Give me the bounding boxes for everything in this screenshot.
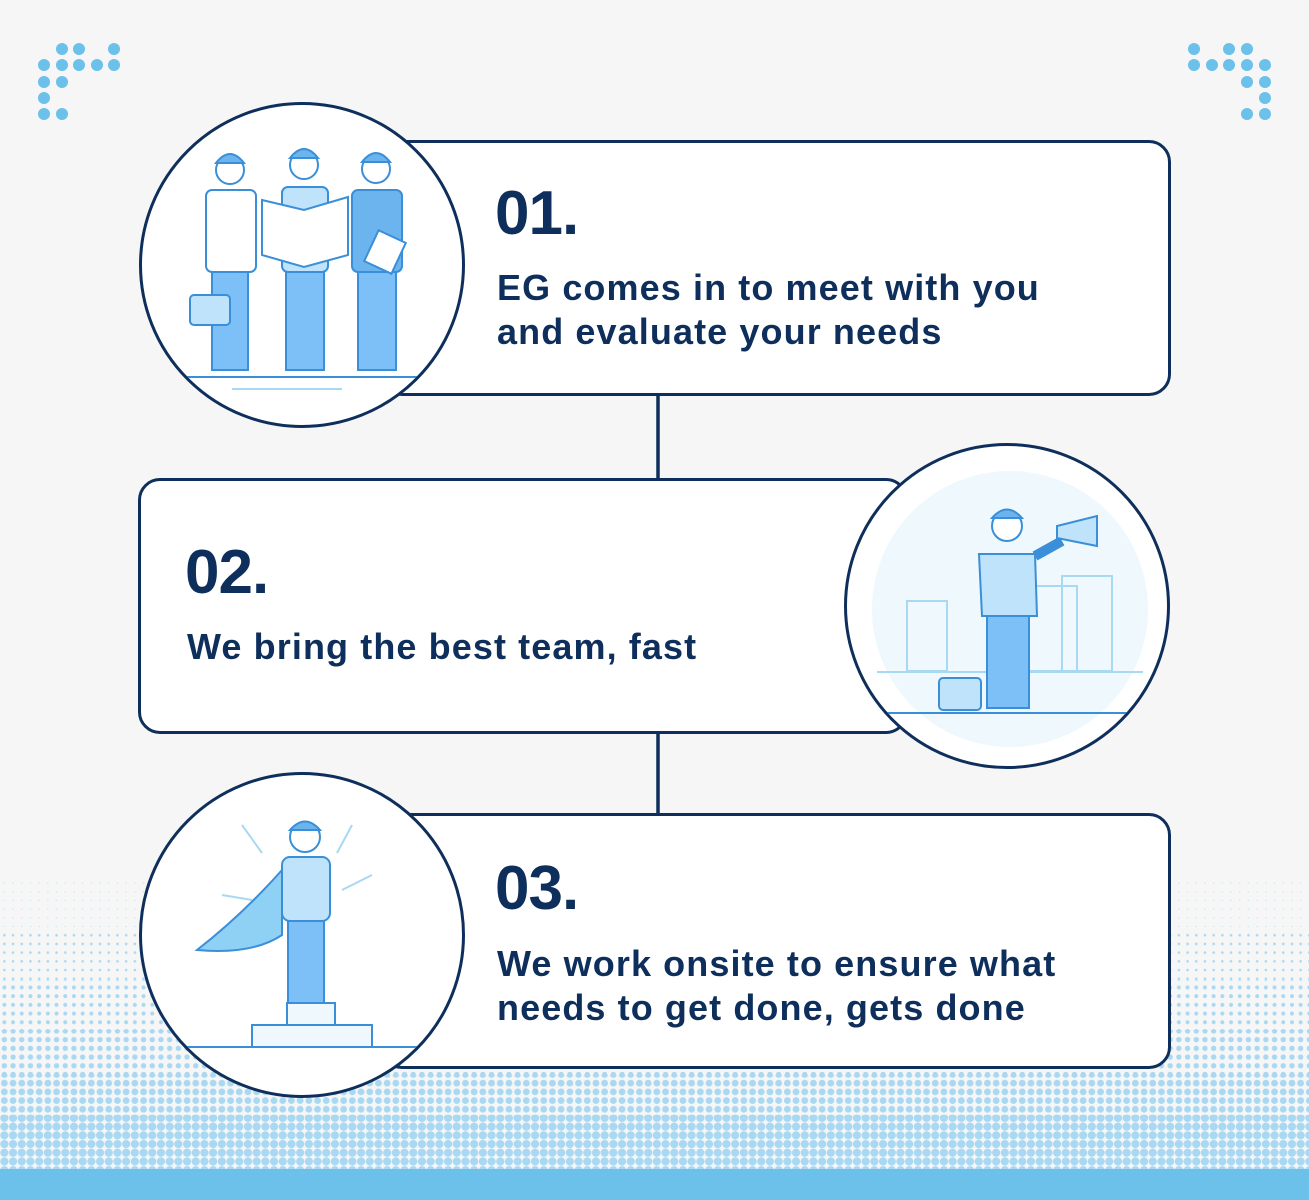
panel: step 3 bbox=[380, 813, 1171, 1069]
corner dots: top-right bbox=[1188, 43, 1271, 120]
icon: three workers bbox=[139, 102, 465, 428]
step 3 text: needs to get done, gets done bbox=[497, 987, 1026, 1028]
panel: step 1 bbox=[380, 140, 1171, 396]
step 3 text: We work onsite to ensure what bbox=[497, 943, 1056, 984]
corner dots: top-left bbox=[38, 43, 120, 120]
icon: hero with cape bbox=[139, 772, 465, 1098]
step 2 text: We bring the best team, fast bbox=[187, 626, 697, 667]
panel: step 2 bbox=[138, 478, 908, 734]
step 3 number: 03. bbox=[495, 854, 578, 923]
step 2 number: 02. bbox=[185, 538, 268, 607]
step 1 number: 01. bbox=[495, 179, 578, 248]
step 3 text bbox=[497, 943, 1056, 1028]
step 1 text: EG comes in to meet with you bbox=[497, 267, 1040, 308]
step 1 text: and evaluate your needs bbox=[497, 311, 942, 352]
icon: man with megaphone bbox=[844, 443, 1170, 769]
step 1 text bbox=[497, 267, 1040, 352]
